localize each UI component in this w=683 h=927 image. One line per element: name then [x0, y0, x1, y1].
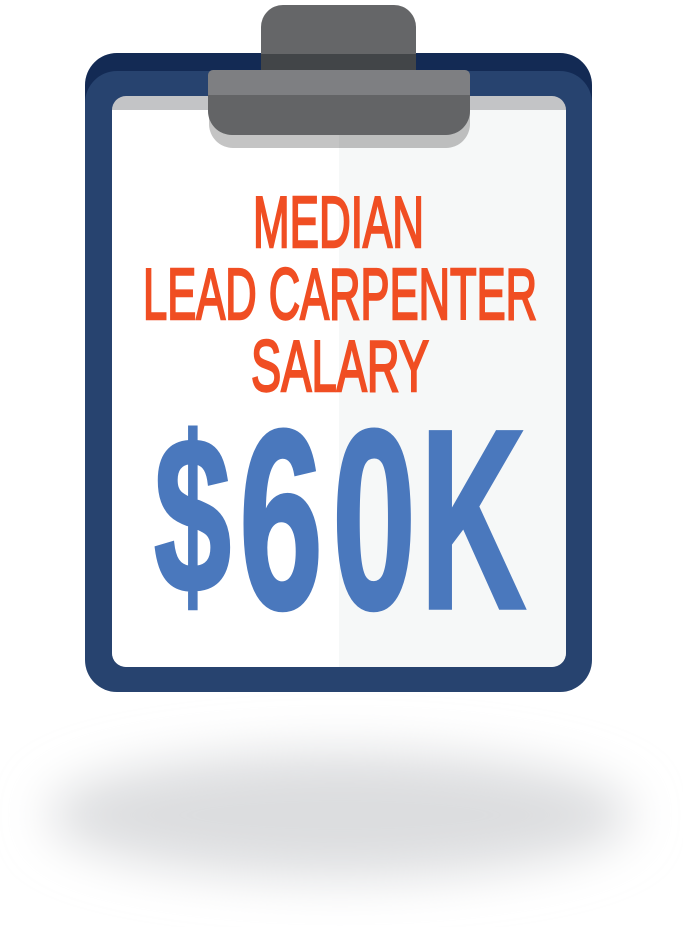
dollar sign: $: [154, 392, 231, 640]
heading line 3: SALARY: [251, 327, 429, 407]
digit 0: 0: [332, 377, 416, 663]
paper sheet: [112, 96, 566, 667]
heading line 1: MEDIAN: [253, 183, 424, 263]
clip top tab: [261, 5, 416, 70]
letter K: K: [420, 377, 526, 663]
heading: median lead carpenter salary: [143, 183, 537, 407]
salary figure: $60K: [154, 377, 526, 663]
drop shadow beneath clipboard: [48, 753, 632, 877]
clip base: [208, 70, 470, 95]
digit 6: 6: [239, 377, 323, 663]
clip shadow on paper: [209, 110, 470, 148]
clip: [208, 5, 470, 148]
clipboard back edge: [85, 53, 592, 173]
clipboard: [85, 5, 592, 692]
clipboard board: [85, 71, 592, 692]
